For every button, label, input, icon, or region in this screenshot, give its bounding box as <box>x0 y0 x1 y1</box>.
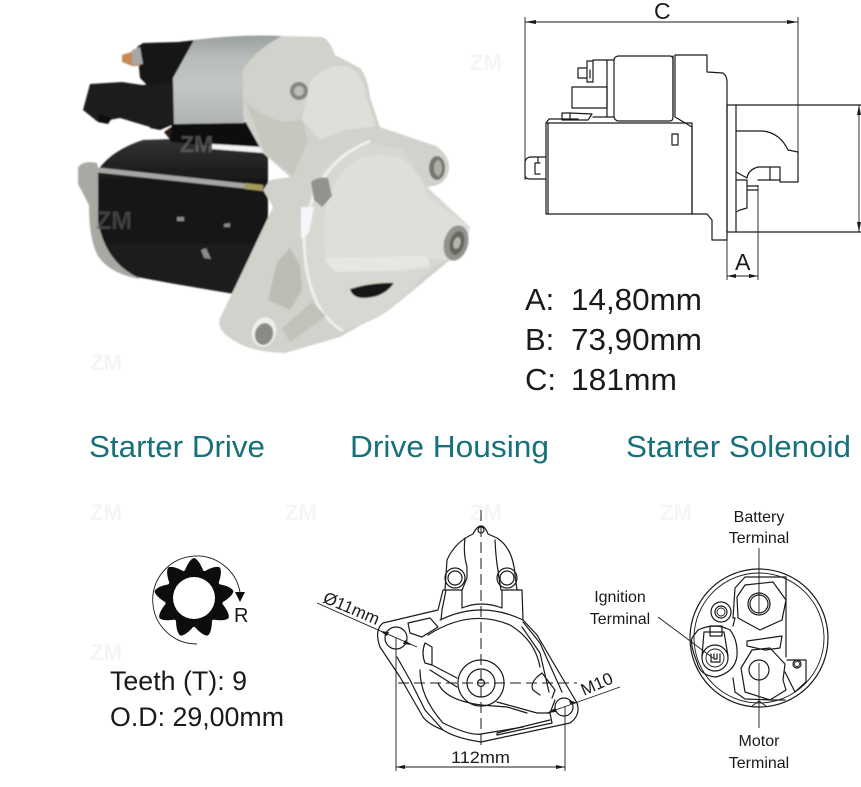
slot <box>747 636 782 650</box>
housing outline <box>378 526 578 742</box>
motor body outline <box>546 119 692 214</box>
thread callout: M10 <box>578 669 616 700</box>
diameter callout: Ø11mm <box>320 588 382 629</box>
small screw <box>711 602 731 622</box>
flange boss <box>311 178 332 207</box>
top screw <box>290 82 308 100</box>
dimension A: A <box>735 249 751 275</box>
drive housing outline <box>673 55 727 240</box>
battery label: Battery <box>734 509 784 526</box>
black motor body <box>98 138 268 295</box>
mounting hole lower <box>249 314 279 350</box>
motor slots <box>177 217 230 259</box>
heading: Starter Solenoid: Starter Solenoid <box>626 429 851 464</box>
motor stud <box>741 648 786 700</box>
teeth count: Teeth (T): 9 <box>110 666 247 696</box>
terminal details <box>562 61 607 120</box>
battery label: Terminal <box>729 530 789 547</box>
drive housing diagram <box>317 510 620 771</box>
left lobe and arm <box>423 643 457 687</box>
nose bearing <box>440 223 472 263</box>
motor label <box>729 663 789 772</box>
solenoid silver cylinder <box>173 36 282 124</box>
nose <box>736 131 798 182</box>
dimension C <box>525 0 798 182</box>
dimension B <box>857 105 861 232</box>
right arm and lobe <box>497 673 555 713</box>
copper terminal nut <box>122 50 140 66</box>
watermark pattern: ZM <box>90 640 122 665</box>
mounting bosses <box>385 627 407 649</box>
dimension A <box>727 185 758 280</box>
dark opening <box>350 283 394 298</box>
rear bearing <box>525 157 546 179</box>
watermark text: ZM <box>180 131 213 157</box>
dome rib <box>325 256 430 272</box>
ignition label: Terminal <box>590 611 650 628</box>
dark under solenoid <box>170 122 264 152</box>
bottom notch <box>752 701 766 706</box>
outer diameter: O.D: 29,00mm <box>110 702 284 732</box>
dimension values <box>525 282 702 397</box>
white highlight <box>301 207 314 239</box>
black wire clip <box>164 125 180 142</box>
icon: pinion gear <box>153 556 248 644</box>
width dimension <box>396 638 565 771</box>
heading: Drive Housing: Drive Housing <box>350 429 549 464</box>
technical side view <box>525 0 861 280</box>
ignition label: Ignition <box>594 589 646 606</box>
watermark pattern: ZM <box>660 500 692 525</box>
lower contour <box>733 660 806 700</box>
top hole <box>478 527 484 533</box>
solenoid diagram <box>590 509 828 772</box>
C value <box>525 362 677 397</box>
side bolt holes <box>445 568 465 588</box>
lower ribs <box>268 248 302 310</box>
flange <box>727 105 861 232</box>
bottom slot <box>497 713 552 735</box>
rod thread <box>245 186 263 188</box>
watermark pattern: ZM <box>90 350 122 375</box>
rear black solenoid <box>137 40 196 130</box>
left pocket <box>408 618 438 637</box>
connector plug <box>83 82 176 127</box>
right small terminal <box>793 660 801 668</box>
mounting hole upper <box>429 156 445 180</box>
dome <box>323 155 470 272</box>
C value: 181mm <box>571 362 677 397</box>
dome arcs <box>428 590 540 667</box>
flange inner face <box>304 143 470 330</box>
dome inner lines <box>441 538 518 620</box>
battery stud <box>737 582 786 630</box>
width dimension: 112mm <box>451 748 510 767</box>
upper contour <box>733 577 786 657</box>
aluminium drive housing <box>219 36 470 353</box>
centre lines <box>398 510 577 745</box>
C value: C: <box>525 362 556 397</box>
small window <box>672 134 678 145</box>
watermark pattern <box>90 50 692 665</box>
rear end cap <box>78 162 140 279</box>
white gap <box>212 144 264 153</box>
solenoid outline <box>593 56 673 121</box>
A value: 14,80mm <box>571 282 702 317</box>
watermark pattern: ZM <box>470 50 502 75</box>
motor label: Motor <box>739 733 780 750</box>
ignition label <box>590 589 713 658</box>
photo: starter motor: ZM <box>96 207 132 235</box>
icon: pinion gear: R <box>234 605 248 627</box>
ignition connector <box>692 626 737 677</box>
watermark pattern: ZM <box>660 325 692 350</box>
battery label <box>729 509 789 613</box>
pinion <box>736 180 758 212</box>
photo: starter motor <box>78 36 472 353</box>
B value: B: <box>525 322 554 357</box>
lower body arcs <box>420 670 523 734</box>
watermark pattern: ZM <box>285 500 317 525</box>
flange rim <box>304 141 370 331</box>
motor label: Terminal <box>729 755 789 772</box>
hub <box>458 660 504 706</box>
diameter callout <box>317 588 417 647</box>
B value: 73,90mm <box>571 322 702 357</box>
watermark pattern: ZM <box>470 500 502 525</box>
gear specs <box>110 666 284 732</box>
solenoid rings <box>690 569 828 707</box>
heading: Starter Drive: Starter Drive <box>89 429 265 464</box>
inner side walls <box>397 622 562 730</box>
upper boss highlight <box>302 66 376 140</box>
A value: A: <box>525 282 554 317</box>
watermark pattern: ZM <box>90 500 122 525</box>
thread callout <box>547 669 620 713</box>
lower neck shade <box>245 100 308 176</box>
through rod <box>98 170 245 186</box>
